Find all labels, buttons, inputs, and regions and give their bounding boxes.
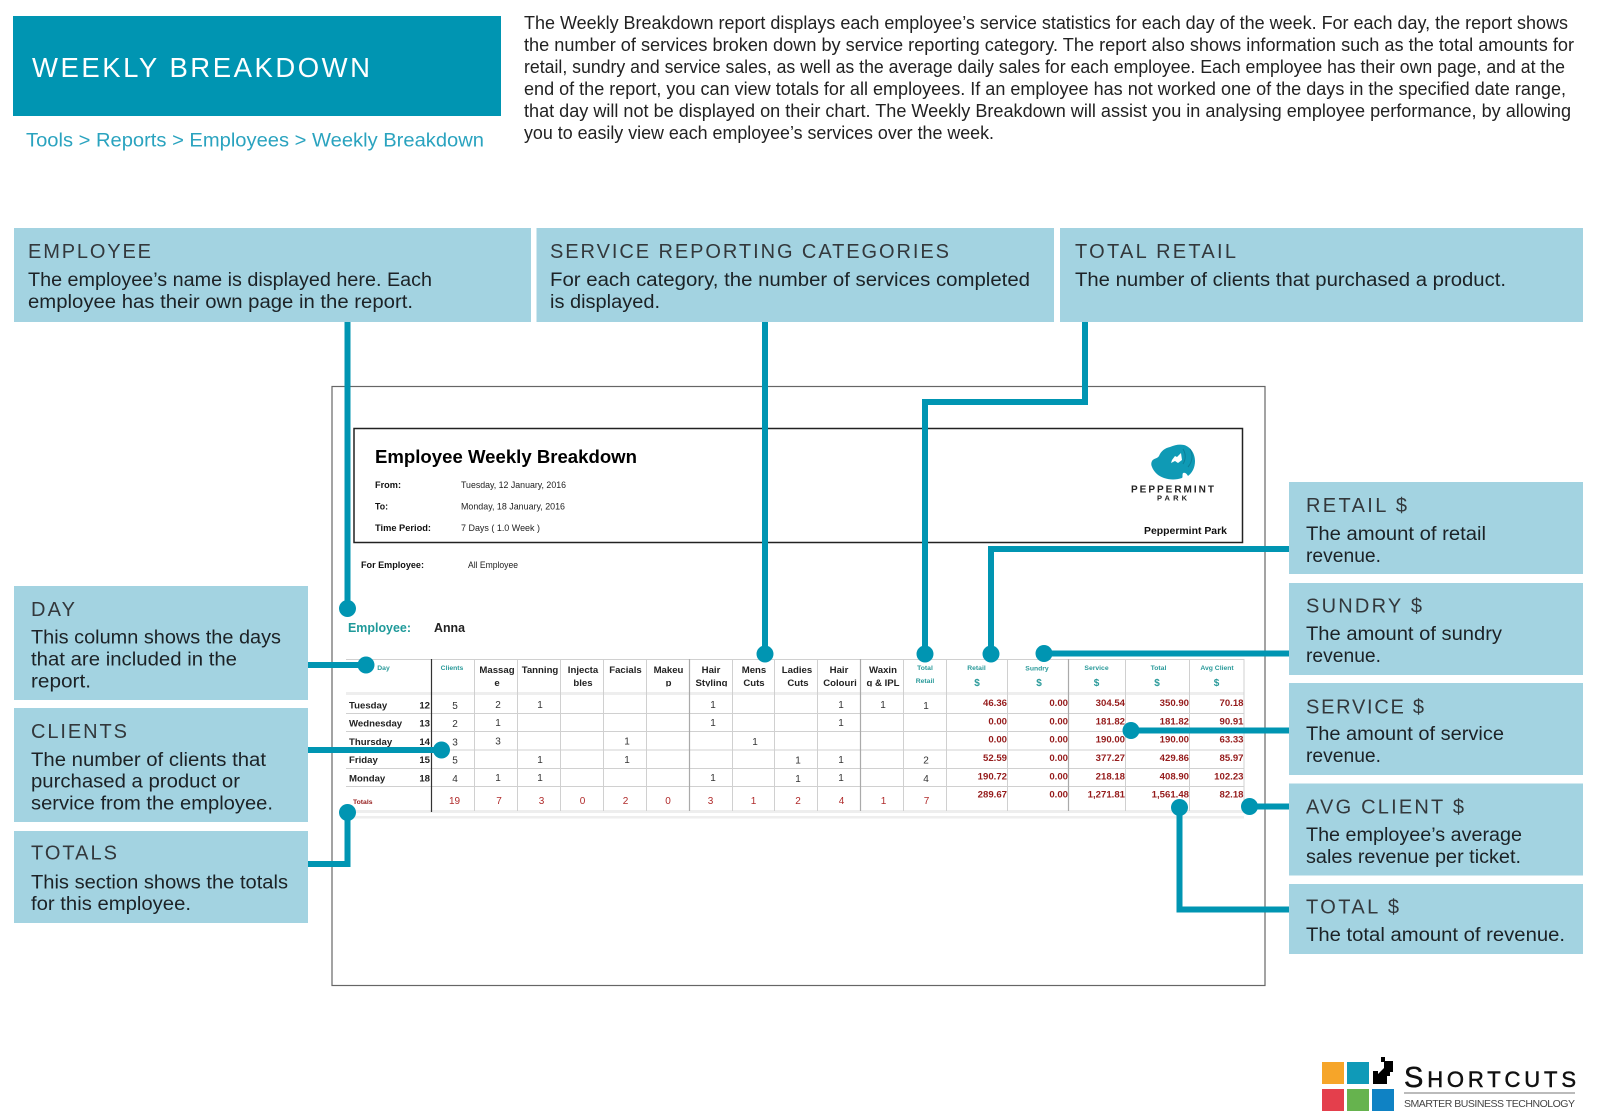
panel: service $: SERVICE $	[1306, 696, 1424, 718]
report dates: Time Period:	[375, 523, 431, 533]
row: Totals: 1,271.81	[1088, 789, 1126, 800]
row: Monday: 4	[452, 774, 458, 785]
panel: total $	[1289, 884, 1583, 954]
row: Wednesday: 2	[452, 719, 458, 730]
table header row: e	[494, 678, 500, 689]
row: Wednesday: 1	[495, 718, 501, 729]
panel: avg client $: AVG CLIENT $	[1306, 796, 1464, 818]
panel: avg client $	[1289, 784, 1583, 876]
row: Monday: 1	[495, 773, 501, 784]
row: Wednesday: 0.00	[1049, 716, 1068, 727]
panel: day: that are included in the	[31, 650, 237, 670]
table header row: $	[974, 678, 980, 689]
table header row: Makeu	[654, 665, 684, 676]
table header row: Hair	[830, 665, 849, 676]
connector: retail $	[982, 549, 1289, 662]
intro paragraph: end of the report, you can view totals for all employees. If an employee has not worked one of the days in the specified date range,	[524, 78, 1566, 99]
row: Totals: 19	[449, 796, 460, 807]
row: Tuesday: 1	[537, 700, 543, 711]
panel: clients: CLIENTS	[31, 721, 127, 743]
panel: avg client $: The employee’s average	[1306, 825, 1522, 846]
table header row: Day	[377, 665, 390, 672]
row: Totals: 82.18	[1219, 789, 1244, 800]
table header row	[378, 666, 1234, 686]
panel: day: This column shows the days	[31, 628, 281, 648]
panel: retail $	[1289, 482, 1583, 574]
row: Monday: 190.72	[978, 771, 1007, 782]
panel: total retail: TOTAL RETAIL	[1075, 241, 1236, 263]
panel: clients: The number of clients that	[31, 750, 267, 771]
row: Thursday: Thursday	[349, 737, 393, 748]
row: Friday	[349, 753, 1244, 766]
table header row: g & IPL	[866, 678, 900, 689]
intro paragraph	[524, 12, 1574, 143]
panel: service reporting categories	[536, 228, 1054, 322]
report page frame	[332, 386, 1265, 986]
report header box	[354, 428, 1242, 542]
connector: totals	[308, 804, 356, 864]
row: Wednesday: 1	[710, 718, 716, 729]
panel: sundry $: revenue.	[1306, 646, 1381, 667]
panel: clients: service from the employee.	[31, 794, 273, 814]
row: Friday: 52.59	[983, 753, 1007, 764]
row: Wednesday: 90.91	[1219, 716, 1244, 727]
panel: totals: This section shows the totals	[31, 872, 288, 894]
table header row: Cuts	[787, 678, 809, 689]
table header row: Styling	[696, 678, 728, 689]
table header row: Waxin	[869, 665, 897, 676]
row: Tuesday: 304.54	[1096, 698, 1126, 709]
row: Wednesday: 181.82	[1096, 716, 1125, 727]
row: Wednesday: 0.00	[988, 716, 1007, 727]
panel: sundry $: SUNDRY $	[1306, 596, 1422, 618]
row: Tuesday: 350.90	[1160, 698, 1189, 709]
row: Friday: 0.00	[1049, 753, 1068, 764]
panel: clients	[14, 708, 308, 822]
shortcuts logo	[1322, 1057, 1576, 1111]
panel: totals: TOTALS	[31, 842, 117, 864]
intro paragraph: the number of services broken down by service reporting category. The report also shows information such as the total amounts for	[524, 34, 1574, 55]
row: Totals: 1	[881, 796, 887, 807]
connector: clients	[308, 742, 450, 758]
row: Monday: Monday	[349, 774, 386, 784]
table header row: $	[1094, 678, 1100, 689]
table header row: Sundry	[1025, 666, 1049, 672]
row: Tuesday: 1	[880, 700, 886, 711]
table header row: Avg Client	[1200, 665, 1234, 672]
row: Monday: 18	[419, 774, 431, 784]
row: Monday: 1	[838, 773, 844, 784]
breadcrumb: Tools > Reports > Employees > Weekly Breakdown	[26, 130, 484, 152]
row: Friday: 1	[537, 755, 543, 766]
row: Tuesday: 1	[838, 700, 844, 711]
icon: coloured squares	[1322, 1062, 1394, 1111]
connector: service $	[1122, 722, 1289, 739]
row: Totals: 3	[708, 796, 714, 807]
row: Totals: 289.67	[978, 789, 1007, 800]
table header row: $	[1154, 678, 1160, 689]
table header row: Massag	[479, 665, 515, 676]
panel: total $: The total amount of revenue.	[1306, 925, 1565, 946]
row: Wednesday	[349, 716, 1244, 730]
row: Tuesday: 2	[495, 700, 501, 711]
row: Tuesday: Tuesday	[349, 700, 388, 712]
row: Thursday: 14	[419, 737, 431, 748]
employee name	[348, 620, 466, 635]
row: Thursday: 63.33	[1219, 735, 1244, 746]
connector: sundry $	[1036, 645, 1289, 662]
row: Friday: 5	[452, 756, 458, 766]
employee filter: For Employee:	[361, 560, 424, 570]
panel: employee: EMPLOYEE	[28, 241, 151, 263]
row: Thursday: 190.00	[1096, 735, 1125, 746]
title banner: WEEKLY BREAKDOWN	[32, 52, 370, 83]
panel: employee: The employee’s name is displayed here. Each	[28, 270, 432, 291]
row: Friday: 15	[419, 755, 431, 766]
row: Tuesday: 12	[419, 700, 430, 712]
panel: totals	[14, 831, 308, 923]
panel: service reporting categories: is displayed.	[550, 292, 660, 313]
table header row: Service	[1084, 665, 1109, 672]
panel: clients: purchased a product or	[31, 772, 241, 792]
employee name: Employee:	[348, 620, 411, 635]
row: Friday: 1	[838, 755, 844, 766]
table header row: Injecta	[568, 665, 599, 676]
row: Monday: 1	[795, 774, 801, 785]
row: Thursday	[349, 735, 1244, 748]
row: Wednesday: 13	[419, 718, 430, 730]
row: Tuesday: 1	[923, 701, 929, 712]
panel: service $: The amount of service	[1306, 724, 1504, 745]
report dates: Monday, 18 January, 2016	[461, 502, 565, 512]
row: Totals: 0	[665, 796, 671, 807]
row: Totals: 0.00	[1049, 789, 1068, 800]
row: Thursday: 0.00	[1049, 735, 1068, 746]
row: Totals: 2	[623, 796, 629, 807]
icon: peppermint park logo: PEPPERMINT	[1131, 484, 1214, 496]
company name: Peppermint Park	[1144, 526, 1227, 537]
panel: total retail: The number of clients that purchased a product.	[1075, 270, 1506, 291]
row: Friday: 1	[624, 755, 630, 766]
table header row: Facials	[609, 665, 642, 676]
row: Monday: 408.90	[1160, 771, 1189, 782]
report dates: To:	[375, 502, 388, 512]
row: Monday: 0.00	[1049, 771, 1068, 782]
row: Wednesday: 1	[838, 718, 844, 729]
table header row: Hair	[702, 665, 721, 676]
row: Totals: 7	[496, 796, 502, 807]
weekly breakdown table	[346, 659, 1244, 818]
row: Tuesday: 0.00	[1049, 698, 1068, 709]
row: Totals: 1	[751, 796, 757, 807]
row: Totals: 1,561.48	[1152, 789, 1190, 800]
connector: day	[308, 656, 374, 674]
row: Totals: 7	[924, 796, 930, 807]
row: Friday: 1	[795, 756, 801, 766]
panel: total $: TOTAL $	[1306, 896, 1399, 918]
employee filter: All Employee	[468, 560, 518, 570]
panel: retail $: revenue.	[1306, 546, 1381, 567]
table header row: bles	[573, 678, 593, 689]
panel: total retail	[1060, 228, 1583, 322]
row: Totals: 3	[539, 796, 545, 807]
report dates: From:	[375, 480, 401, 490]
row: Thursday: 1	[752, 737, 758, 748]
row: Wednesday: Wednesday	[349, 718, 403, 730]
panel: retail $: The amount of retail	[1306, 524, 1486, 545]
icon: peppermint park logo	[1131, 445, 1214, 502]
panel: totals: for this employee.	[31, 894, 191, 915]
report title: Employee Weekly Breakdown	[375, 447, 637, 467]
table header row: Tanning	[522, 665, 558, 676]
connector: total retail	[916, 322, 1085, 662]
title banner	[13, 16, 501, 116]
table header row: $	[1214, 678, 1220, 689]
tagline: SMARTER BUSINESS TECHNOLOGY	[1404, 1098, 1575, 1110]
report dates	[375, 480, 566, 533]
employee filter	[361, 560, 518, 570]
row: Thursday: 3	[452, 738, 458, 748]
table header row: Retail	[967, 665, 986, 672]
report dates: 7 Days ( 1.0 Week )	[461, 523, 540, 533]
table header row: Ladies	[782, 665, 812, 676]
table header row: Total	[917, 665, 933, 672]
row: Monday: 102.23	[1214, 771, 1244, 782]
intro paragraph: you to easily view each employee’s services over the week.	[524, 122, 994, 143]
row: Friday: 2	[923, 756, 929, 766]
row: Tuesday	[349, 698, 1244, 712]
row: Totals	[353, 789, 1244, 807]
row: Monday: 218.18	[1096, 771, 1126, 782]
employee name: Anna	[434, 620, 466, 635]
icon: peppermint park logo: PARK	[1157, 494, 1188, 502]
panel: service reporting categories: SERVICE REPORTING CATEGORIES	[550, 241, 949, 263]
row: Wednesday: 181.82	[1160, 716, 1189, 727]
row: Friday: 377.27	[1096, 753, 1125, 764]
row: Tuesday: 5	[452, 701, 458, 712]
panel: day	[14, 586, 308, 700]
row: Tuesday: 70.18	[1219, 698, 1244, 709]
panel: service reporting categories: For each category, the number of services completed	[550, 270, 1030, 291]
panel: service $: revenue.	[1306, 746, 1381, 767]
row: Totals: 4	[839, 796, 845, 807]
panel: employee: employee has their own page in the report.	[28, 292, 413, 313]
panel: retail $: RETAIL $	[1306, 495, 1407, 517]
row: Tuesday: 46.36	[983, 698, 1007, 709]
intro paragraph: The Weekly Breakdown report displays each employee’s service statistics for each day of the week. For each day, the report shows	[524, 12, 1568, 33]
row: Tuesday: 1	[710, 700, 716, 711]
table header row: Total	[1151, 665, 1166, 672]
row: Friday: 429.86	[1160, 753, 1189, 764]
row: Thursday: 0.00	[988, 735, 1007, 746]
row: Thursday: 3	[495, 736, 501, 748]
row: Totals: 2	[795, 796, 801, 807]
panel: sundry $: The amount of sundry	[1306, 624, 1503, 645]
icon: black stairs	[1373, 1057, 1393, 1084]
row: Monday	[349, 771, 1244, 785]
panel: sundry $	[1289, 583, 1583, 675]
row: Monday: 4	[923, 774, 929, 785]
row: Thursday: 190.00	[1160, 735, 1189, 746]
panel: service $	[1289, 683, 1583, 775]
connector: service reporting categories	[756, 322, 774, 662]
table header row: Retail	[916, 678, 934, 685]
row: Thursday: 1	[624, 736, 630, 748]
connector: avg client $	[1241, 798, 1289, 815]
intro paragraph: that day will not be displayed on their chart. The Weekly Breakdown will assist you in analysing employee performance, by allowing	[524, 100, 1571, 121]
panel: day: DAY	[31, 599, 75, 621]
table header row: Clients	[441, 665, 464, 672]
connector: employee	[339, 322, 356, 617]
table header row: p	[666, 678, 672, 689]
row: Totals: Totals	[353, 799, 373, 806]
intro paragraph: retail, sundry and service sales, as well as the average daily sales for each employee. Each employee has their own page, and at the	[524, 56, 1565, 77]
report dates: Tuesday, 12 January, 2016	[461, 480, 566, 490]
panel: avg client $: sales revenue per ticket.	[1306, 847, 1521, 868]
connector: total $	[1171, 799, 1289, 910]
row: Monday: 1	[710, 773, 716, 784]
table header row: Cuts	[743, 678, 765, 689]
row: Totals: 0	[580, 796, 586, 807]
row: Monday: 1	[537, 773, 543, 784]
table header row: Mens	[742, 665, 766, 676]
table header row: $	[1036, 678, 1042, 689]
wordmark: SHORTCUTS	[1404, 1062, 1576, 1094]
panel: day: report.	[31, 672, 91, 692]
table header row: Colouri	[823, 678, 857, 689]
panel: employee	[14, 228, 531, 322]
row: Friday: 85.97	[1219, 753, 1244, 764]
row: Friday: Friday	[349, 755, 378, 766]
